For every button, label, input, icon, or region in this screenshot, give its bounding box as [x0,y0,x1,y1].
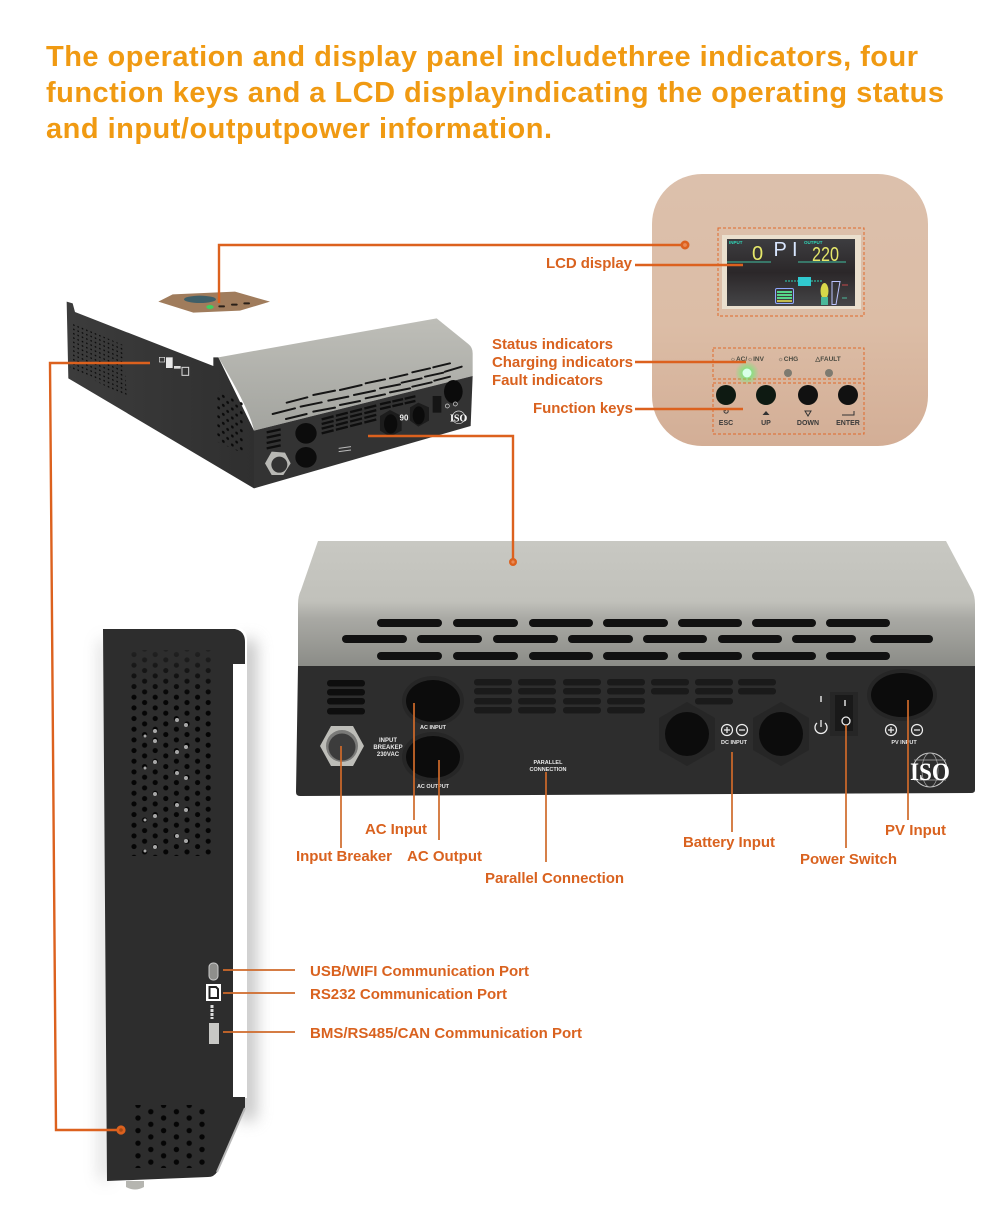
PV input port: PV INPUT [891,740,917,746]
line: rear view [368,436,516,565]
label: LCD display: LCD display [546,255,633,272]
parallel connection marking: CONNECTION [530,767,567,773]
front vents [267,396,417,448]
label: USB port: USB/WIFI Communication Port [310,963,529,980]
input breaker: INPUT [379,738,397,744]
upper vent holes [128,648,212,856]
AC input port [402,676,464,731]
USB port [209,963,218,980]
PV input port [867,669,937,746]
rear view inverter [296,541,975,796]
label: input breaker: Input Breaker [296,848,392,865]
AC input port: AC INPUT [420,725,447,731]
function keys: UP [761,420,771,427]
dark side wall [103,629,245,1181]
lower vent holes [130,1105,210,1168]
side wall [67,302,254,488]
label: parallel connection: Parallel Connection [485,870,624,887]
label: AC input: AC Input [365,821,427,838]
status indicators [713,348,864,385]
dark front face [296,666,975,796]
control panel [158,292,270,313]
front vents [327,679,776,714]
parallel connection marking [530,760,567,773]
lines: rear ports [341,700,908,862]
function keys: ESC [719,420,733,427]
LCD display: INPUT [729,240,743,245]
function keys: DOWN [797,420,819,427]
LCD display: 220 [812,244,839,266]
labels [296,255,946,1042]
front face [254,376,473,488]
cap slots [273,363,462,419]
side view inverter [100,627,256,1190]
cap slots [342,619,933,660]
line: LCD overview [219,242,688,303]
label: RS232 port: RS232 Communication Port [310,986,507,1003]
function keys: ENTER [836,420,860,427]
grey cap [218,318,473,431]
BMS port [209,1023,219,1044]
label: power switch: Power Switch [800,851,897,868]
lines: communication ports [223,970,295,1032]
callout lines [50,242,908,1133]
LCD display: P I [773,239,798,261]
line: side view [50,363,150,1133]
input breaker [320,726,403,766]
panel: display close-up [652,174,928,446]
input breaker: 230VAC [377,752,400,758]
label: indicators: Charging indicators [492,354,633,371]
input breaker: BREAKEP [373,745,403,751]
label: PV input: PV Input [885,822,946,839]
RS232 port [206,984,221,1001]
white top edge [104,627,247,1098]
label: AC output: AC Output [407,848,482,865]
title: function keys and a LCD displayindicating the operating status [46,77,944,109]
port marker dots [210,1005,214,1019]
front ports [265,380,467,475]
battery terminals [659,702,809,766]
parallel connection marking: PARALLEL [534,760,563,766]
label: indicators: Status indicators [492,336,613,353]
title [46,41,944,145]
battery terminals: DC INPUT [721,740,748,746]
status indicators: △FAULT [814,356,841,363]
front ports: 90 [400,414,409,423]
title: The operation and display panel includethree indicators, four [46,41,918,73]
label: battery input: Battery Input [683,834,775,851]
lines: panel labels [635,265,746,409]
function keys [713,383,864,434]
LCD display: 0 [752,243,763,265]
label: indicators [492,336,633,389]
label: BMS port: BMS/RS485/CAN Communication Port [310,1025,582,1042]
label: function keys: Function keys [533,400,633,417]
function keys: ↻ [723,407,730,416]
AC output port: AC OUTPUT [417,784,450,790]
label: indicators: Fault indicators [492,372,603,389]
LCD display: OUTPUT [804,240,823,245]
status indicators: ☼AC/☼INV [730,356,765,363]
front ports: ISO [450,413,467,424]
isometric inverter [67,292,473,488]
grey cap [298,541,975,666]
title: and input/outputpower information. [46,113,552,145]
power switch [815,692,858,736]
AC output port [402,732,464,790]
foot [126,1181,144,1190]
LCD display [718,228,864,316]
status indicators: ☼CHG [778,356,798,363]
side ports [159,357,189,375]
ISO mark: ISO [910,759,950,786]
